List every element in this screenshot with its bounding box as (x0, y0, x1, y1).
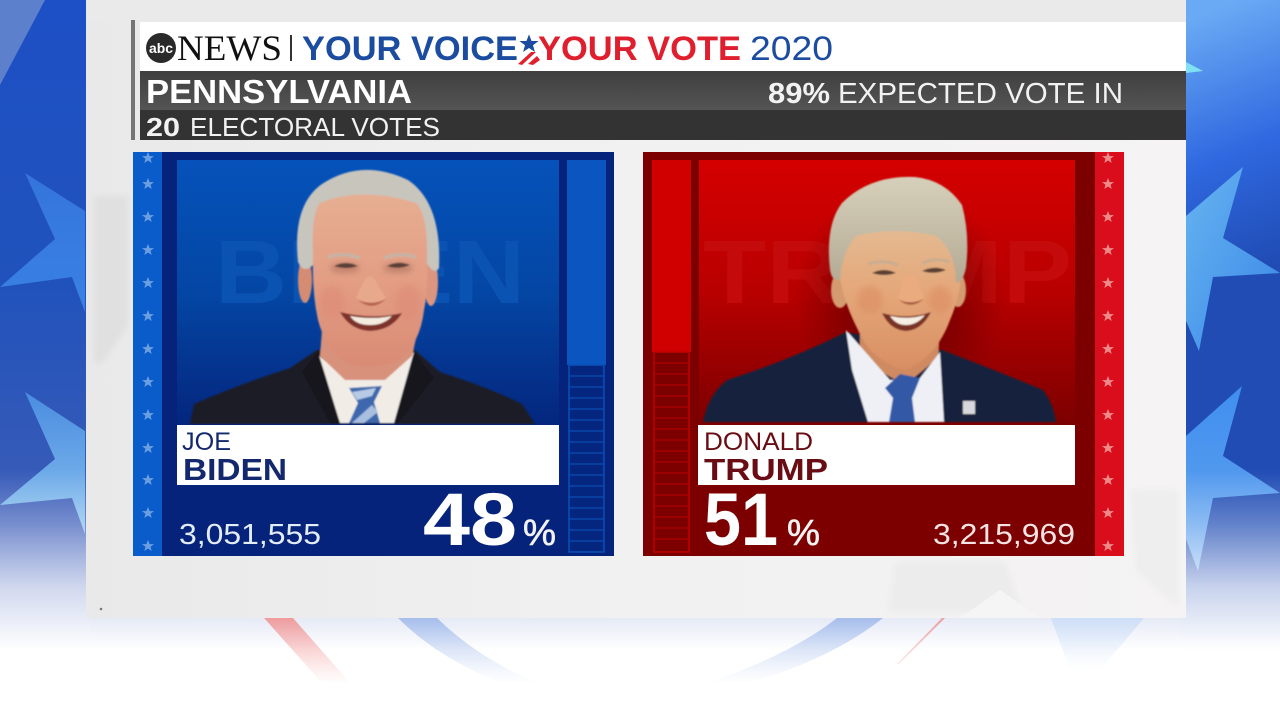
icon: slogan star (518, 34, 540, 65)
panel: Trump (643, 152, 1124, 561)
nose (898, 275, 924, 302)
eye shadows (330, 263, 413, 273)
header: electoral votes band: 20 (146, 112, 180, 142)
neck (860, 330, 940, 385)
brows (328, 255, 360, 258)
icon: abc logo (146, 33, 176, 63)
star strip: Trump (1095, 152, 1124, 556)
tie (349, 386, 382, 423)
expected vote share: EXPECTED VOTE IN (838, 78, 1123, 110)
watermark: BIDEN: BIDEN (215, 223, 525, 323)
icon: abc logo: abc (149, 40, 173, 56)
panel: Biden (133, 152, 614, 561)
jacket (703, 332, 1056, 422)
small dot (100, 608, 102, 610)
name plate: Trump (698, 425, 1075, 487)
percentage: Biden (423, 478, 556, 561)
header: white logo strip (140, 22, 1186, 71)
slogan: 2020: 2020 (750, 30, 833, 68)
vote meter: Trump (652, 160, 691, 552)
smile (882, 312, 931, 331)
eyes (334, 263, 358, 268)
tie (885, 374, 920, 422)
vote meter: Biden (567, 160, 606, 552)
portrait background: Trump (699, 160, 1075, 425)
lapels (302, 352, 340, 423)
cheek shading (319, 284, 421, 320)
vote count: Trump: 3,215,969 (933, 519, 1075, 551)
hair (829, 177, 967, 282)
vote count: Biden: 3,051,555 (179, 519, 321, 551)
ears (831, 272, 849, 308)
portrait background: Biden (177, 160, 559, 425)
expected vote share: 89% (768, 78, 830, 110)
divider (290, 35, 292, 61)
percentage: Biden: % (523, 512, 556, 553)
hair (297, 170, 439, 271)
star strip: Biden (133, 152, 162, 556)
shirt collar (317, 352, 414, 423)
face (313, 194, 427, 367)
name plate: Trump: DONALD (704, 428, 813, 456)
state name: PENNSYLVANIA (146, 73, 412, 110)
main panel (86, 0, 1186, 618)
slogan: your vote: YOUR VOTE (538, 30, 741, 68)
name plate: Trump: TRUMP (704, 452, 828, 487)
face shading (857, 286, 952, 314)
name plate: Biden (177, 425, 559, 487)
jacket (190, 350, 535, 424)
shirt collar (846, 330, 944, 422)
flag pin (963, 401, 975, 414)
header: left accent bar (131, 20, 135, 140)
header: electoral votes band: ELECTORAL VOTES (190, 112, 440, 142)
name plate: Biden: BIDEN (183, 452, 287, 487)
slogan: your voice: YOUR VOICE (302, 30, 518, 68)
face (838, 220, 962, 370)
eyes (872, 270, 896, 275)
watermark: TRUMP: TRUMP (703, 223, 1072, 323)
name plate: Biden: JOE (182, 428, 231, 456)
ears (298, 257, 312, 303)
percentage: Trump: % (787, 512, 820, 553)
percentage: Trump: 51 (704, 478, 778, 561)
portrait: Trump (703, 177, 1056, 422)
NEWS wordmark: NEWS (177, 28, 282, 68)
portrait: Biden (190, 170, 535, 424)
header: electoral votes band (140, 110, 1186, 142)
portrait shadow: Trump (795, 185, 1005, 415)
percentage: Biden: 48 (423, 478, 517, 561)
smile (340, 312, 402, 331)
header: state band (140, 71, 1186, 110)
neck (320, 330, 418, 380)
brows (868, 262, 898, 265)
nose (356, 276, 386, 303)
